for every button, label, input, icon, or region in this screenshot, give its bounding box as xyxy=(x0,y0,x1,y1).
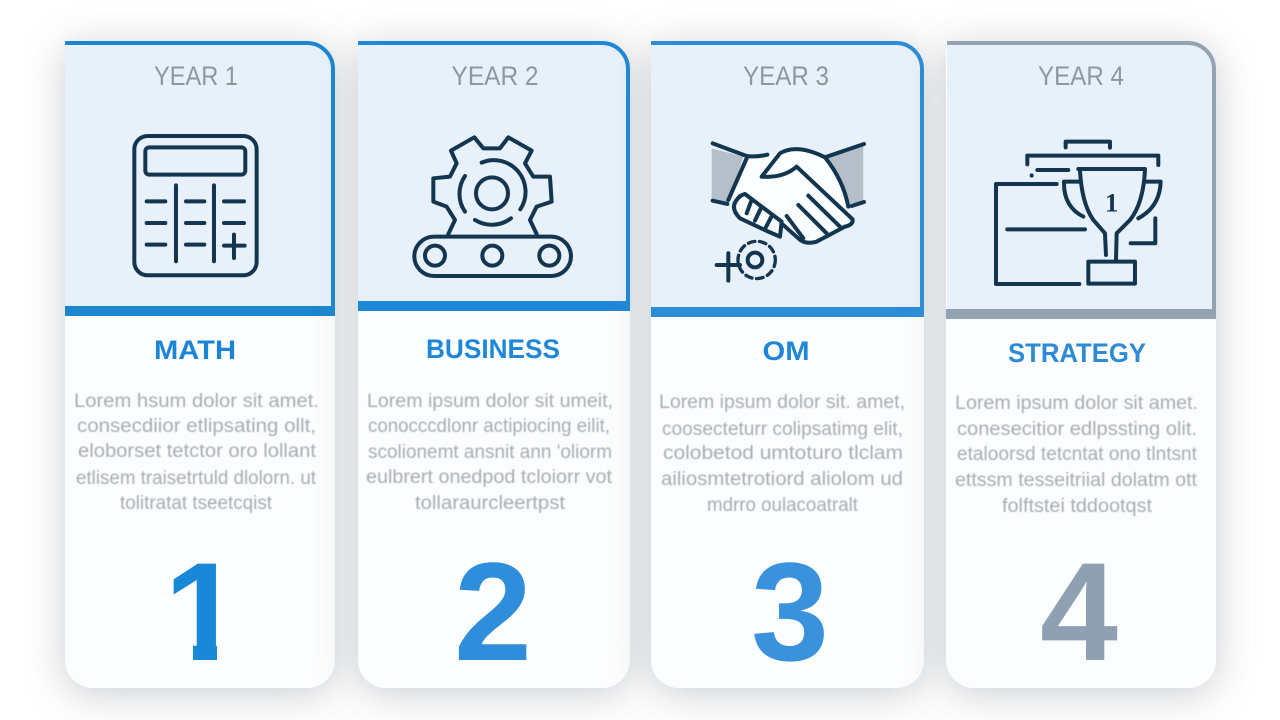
body text: Lorem hsum dolor sit amet. xyxy=(74,391,319,412)
heading: MATH xyxy=(154,335,236,365)
step number: 3 xyxy=(751,533,829,690)
step number: 2 xyxy=(454,533,532,690)
body text: eloborset tetctor oro lollant xyxy=(78,441,317,462)
panel: year 1 math xyxy=(65,41,335,690)
icon: briefcase and trophy xyxy=(996,142,1161,284)
panel: year 3 om xyxy=(651,41,924,690)
icon: calculator xyxy=(134,136,257,275)
heading: STRATEGY xyxy=(1008,338,1146,368)
body text: folftstei tddootqst xyxy=(1002,496,1153,517)
step number: 4 xyxy=(1040,533,1118,690)
header bottom bar xyxy=(946,309,1216,319)
header bottom bar xyxy=(358,301,630,311)
body text xyxy=(74,391,319,514)
body text: Lorem ipsum dolor sit. amet, xyxy=(659,392,905,413)
body text: tolitratat tseetcqist xyxy=(120,493,273,514)
body text xyxy=(955,393,1198,517)
year label: YEAR 2 xyxy=(452,61,538,91)
header block xyxy=(947,43,1214,314)
step number: 1 xyxy=(164,533,242,690)
body text: consecdiior etlipsating ollt, xyxy=(77,416,316,437)
header block xyxy=(65,43,333,311)
body text: eulbrert onedpod tcloiorr vot xyxy=(366,467,613,488)
header outline xyxy=(65,43,333,308)
body text: scolionemt ansnit ann 'oliorm xyxy=(368,442,612,463)
header block xyxy=(358,43,628,306)
body text: mdrro oulacoatralt xyxy=(707,495,859,516)
body text: coosecteturr colipsatimg elit, xyxy=(662,419,903,440)
icon: gear on conveyor xyxy=(414,137,571,276)
year label: YEAR 3 xyxy=(743,61,829,91)
body text: conocccdlonr actipiocing eilit, xyxy=(368,416,610,437)
body text: tollaraurcleertpst xyxy=(415,493,566,514)
body text: ettssm tesseitriial dolatm ott xyxy=(955,470,1198,491)
body text: Lorem ipsum dolor sit amet. xyxy=(955,393,1198,414)
panel: year 4 strategy xyxy=(946,41,1216,690)
body text: etlisem traisetrtuld dlolorn. ut xyxy=(76,468,317,489)
header outline xyxy=(651,43,922,309)
heading: BUSINESS xyxy=(426,334,560,364)
body text: etaloorsd tetcntat ono tlntsnt xyxy=(957,444,1198,465)
body text: colobetod umtoturo tlclam xyxy=(663,443,903,464)
year label: YEAR 4 xyxy=(1038,61,1124,91)
card background xyxy=(651,41,924,688)
card background xyxy=(358,41,630,688)
card background xyxy=(946,41,1216,688)
body text xyxy=(366,391,613,514)
body text: conesecitior edlpssting olit. xyxy=(957,419,1197,440)
header outline xyxy=(947,43,1214,311)
panel: year 2 business xyxy=(358,41,630,690)
header block xyxy=(651,43,922,312)
header outline xyxy=(358,43,628,303)
body text: ailiosmtetrotiord aliolom ud xyxy=(661,469,903,490)
card background xyxy=(65,41,335,688)
heading: OM xyxy=(762,336,810,366)
header bottom bar xyxy=(651,307,924,317)
trophy number: 1 xyxy=(1105,188,1118,218)
header bottom bar xyxy=(65,306,335,316)
icon: handshake with gear xyxy=(712,143,864,281)
body text xyxy=(659,392,905,516)
body text: Lorem ipsum dolor sit umeit, xyxy=(367,391,613,412)
year label: YEAR 1 xyxy=(154,61,238,91)
